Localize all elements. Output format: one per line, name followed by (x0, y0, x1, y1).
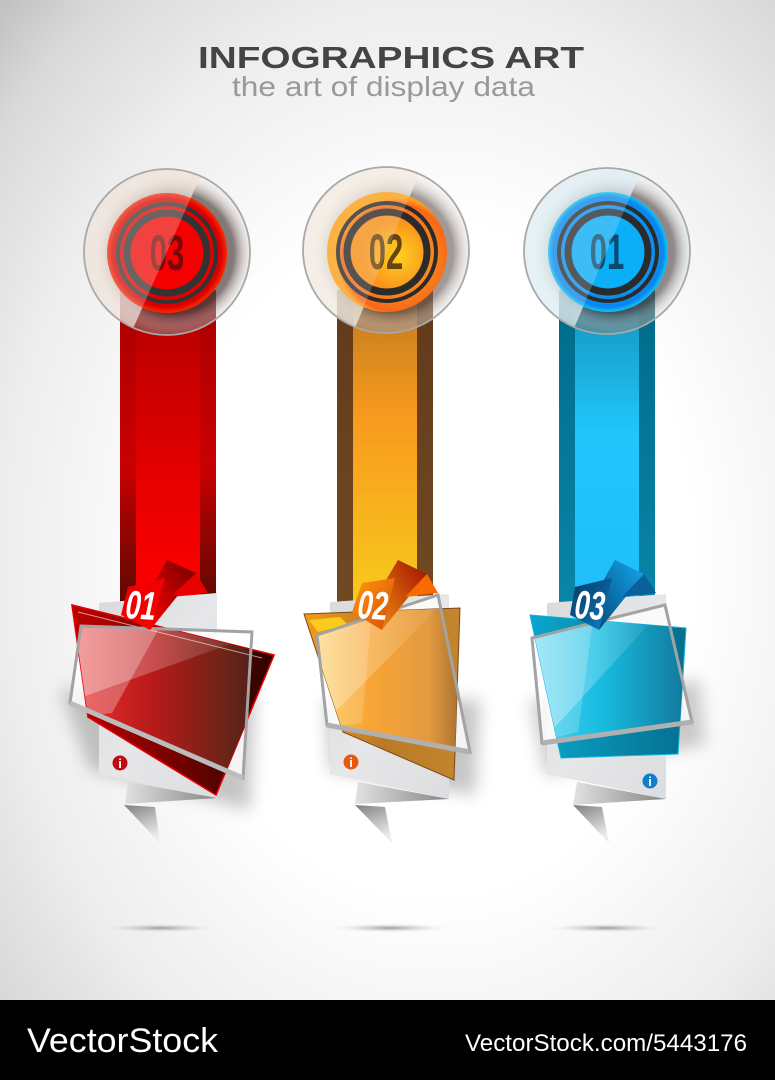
red tag 01: 01 (124, 583, 158, 629)
blue tag 03: 03 (573, 583, 607, 629)
orange tag 02: 02 (356, 583, 390, 629)
blue info icon: i (648, 774, 652, 789)
blue tag 03 (570, 560, 656, 630)
red origami note (60, 560, 274, 843)
orange origami note (300, 560, 480, 843)
column: red (60, 150, 274, 933)
footer brand: VectorStock (27, 1022, 219, 1060)
orange ribbon banner (337, 290, 433, 610)
title: INFOGRAPHICS ART (198, 40, 584, 75)
blue origami note (525, 560, 705, 843)
subtitle: the art of display data (232, 71, 535, 102)
red ground shadow (94, 923, 226, 933)
blue ground shadow (541, 923, 673, 933)
column: blue (523, 167, 711, 932)
orange info icon: i (349, 755, 353, 770)
red ribbon banner (120, 290, 216, 610)
orange tag 02 (352, 560, 438, 630)
orange glass badge 02: 02 (369, 223, 403, 280)
blue ribbon banner (559, 290, 655, 610)
red info icon: i (118, 756, 122, 771)
red info icon (112, 756, 128, 771)
orange glass badge 02 (302, 166, 470, 334)
footer URL: VectorStock.com/5443176 (465, 1030, 747, 1057)
red glass badge 03 (83, 168, 251, 336)
orange info icon (344, 754, 358, 770)
red glass badge 03: 03 (150, 224, 184, 281)
blue glass badge 01 (523, 167, 691, 335)
blue info icon (642, 774, 658, 789)
footer bar (0, 1000, 775, 1080)
blue glass badge 01: 01 (590, 223, 624, 280)
orange ground shadow (324, 923, 456, 933)
column: orange (280, 150, 480, 933)
red tag 01 (121, 560, 208, 630)
